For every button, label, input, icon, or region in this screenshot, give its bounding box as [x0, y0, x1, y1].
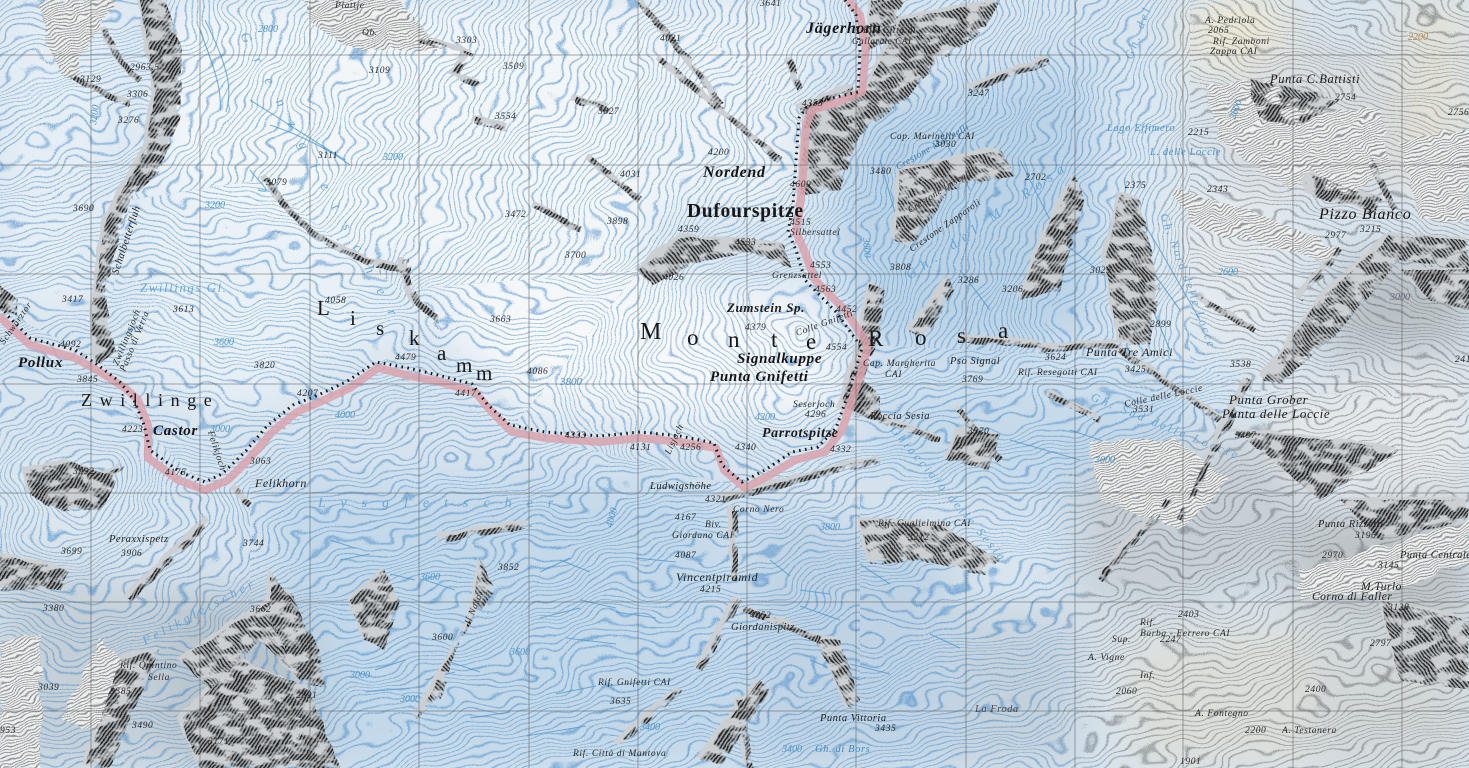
blue glacier and lake names: Lysgletscher: [317, 496, 568, 511]
spot heights: 4092: [60, 340, 81, 350]
blue contour elevation labels: 4200: [755, 412, 775, 423]
secondary place labels: Lisjoch: [663, 423, 686, 457]
spot heights: 3600: [431, 633, 453, 643]
spot heights: 2756: [1448, 108, 1469, 118]
spot heights: 3206: [1001, 285, 1023, 295]
secondary place labels: La Froda: [974, 704, 1019, 715]
label: Liskamm: s: [376, 316, 384, 340]
secondary place labels: Cap. Margherita: [863, 359, 936, 369]
blue glacier and lake names: Lago Effimero: [1106, 123, 1175, 134]
label: Jägerhorn: Jägerhorn: [805, 20, 882, 37]
spot heights: 3497: [1234, 431, 1257, 441]
spot heights: 2963.5: [130, 63, 160, 73]
spot heights: 3129: [79, 75, 101, 85]
spot heights: 4052: [750, 611, 771, 621]
label: Monte Rosa: R: [868, 326, 884, 351]
label: Monte Rosa: n: [728, 327, 740, 352]
blue contour elevation labels: 3200: [204, 200, 225, 211]
spot heights: 3769: [961, 375, 983, 385]
label: Monte Rosa: e: [806, 329, 816, 354]
blue glacier and lake names: Grenzgletscher: [236, 30, 408, 334]
secondary place labels: Punta Rizzetti: [1317, 519, 1384, 530]
secondary place labels: Zwillingsjoch: [112, 308, 143, 367]
spot heights: 4553: [810, 261, 831, 271]
spot heights: 2215: [1188, 128, 1209, 138]
secondary place labels: Colle delle Loccie: [1124, 384, 1204, 410]
label: Castor: Castor: [153, 423, 198, 439]
secondary place labels: A. Fontegno: [1194, 709, 1249, 719]
spot heights: 4333: [565, 431, 586, 441]
label: Felikhorn: Felikhorn: [254, 476, 307, 490]
major mountain labels: [18, 20, 1411, 584]
secondary place labels: Schalbetterfluh: [110, 204, 143, 276]
spot heights: 3852: [497, 563, 519, 573]
blue contour elevation labels: 2800: [258, 24, 278, 35]
spot heights: 4175: [165, 468, 186, 478]
label: Monte Rosa: a: [998, 318, 1008, 343]
blue glacier and lake names: Felikgletscher: [139, 575, 259, 648]
spot heights: 2702: [1025, 173, 1046, 183]
secondary place labels: Crestone Imseng: [906, 169, 973, 216]
spot heights: 953: [0, 726, 16, 736]
secondary place labels: Cap. Marinelli CAI: [890, 132, 975, 142]
secondary place labels: Ob.: [362, 28, 378, 38]
spot heights: 4355: [802, 99, 823, 109]
spot heights: 3845: [76, 375, 98, 385]
blue contour elevation labels: 3800: [860, 236, 873, 258]
spot heights: 4167: [675, 513, 697, 523]
spot heights: 2977: [1325, 231, 1347, 241]
label: Punta Grober: Punta Grober: [1228, 392, 1309, 407]
secondary place labels: Il Naso: [463, 593, 485, 627]
spot heights: 3624: [1044, 353, 1066, 363]
spot heights: 2797: [1370, 639, 1392, 649]
secondary place labels: Corno Nero: [733, 505, 784, 515]
label: Monte Rosa: o: [915, 325, 926, 350]
spot heights: 3490: [131, 721, 153, 731]
blue contour elevation labels: 4000: [604, 507, 620, 529]
spot heights: 2400: [1305, 685, 1326, 695]
label: Pollux: Pollux: [18, 355, 63, 371]
secondary place labels: Punta Vittoria: [819, 713, 887, 724]
spot heights: 2403: [1178, 610, 1199, 620]
secondary place labels: Silbersattel: [790, 228, 840, 238]
label: Liskamm: i: [350, 306, 356, 330]
spot heights: 4031: [620, 170, 641, 180]
blue contour elevation labels: 3000: [1094, 455, 1115, 466]
secondary place labels: Crestone Zapparoli: [908, 198, 983, 254]
secondary place labels: Rif. Resegotti CAI: [1017, 367, 1098, 378]
label: Dufourspitze: Dufourspitze: [687, 201, 804, 222]
secondary place labels: Gallarate CAI: [852, 36, 912, 46]
spot heights: 3472: [504, 210, 526, 220]
spot heights: 3029: [1089, 266, 1111, 276]
spot heights: 4086: [527, 367, 548, 377]
spot heights: 3808: [889, 263, 911, 273]
secondary place labels: Rif. Città di Mantova: [572, 748, 666, 759]
blue glacier and lake names: Gh. di Bors: [815, 744, 870, 755]
spot heights: 3662: [249, 605, 271, 615]
spot heights: 2060: [1116, 687, 1137, 697]
blue contour elevation labels: 3200: [382, 152, 403, 163]
label: Liskamm: k: [409, 326, 420, 350]
spot heights: 3827: [597, 107, 620, 117]
blue contour elevation labels: 2800: [1227, 98, 1245, 121]
label: Pizzo Bianco: Pizzo Bianco: [1318, 206, 1411, 223]
spot heights: 3898: [606, 217, 628, 227]
secondary place labels: Rif. Zamboni: [1212, 36, 1270, 47]
secondary place labels: Rif. Quintino: [119, 660, 177, 671]
spot heights: 4417: [455, 389, 477, 399]
spot heights: 3212: [907, 533, 929, 543]
secondary place labels: Rif. Gnifetti CAI: [597, 677, 671, 688]
blue contour elevation labels: 3800: [819, 522, 840, 533]
spot heights: 3699: [60, 547, 82, 557]
spot heights: 4479: [395, 353, 416, 363]
secondary place labels: Roccia Sesia: [869, 411, 930, 422]
spot heights: 4359: [678, 225, 699, 235]
spot heights: 3538: [1229, 360, 1251, 370]
spot heights: 3306: [126, 90, 148, 100]
spot heights: 3030: [934, 140, 956, 150]
spot heights: 4332: [830, 445, 851, 455]
spot heights: 2375: [1125, 181, 1146, 191]
spot heights: 3145: [1377, 561, 1399, 571]
label: Zumstein Spitze: Zumstein Sp.: [726, 300, 805, 315]
secondary place labels: Giordano CAI: [672, 531, 734, 541]
spot heights: 4215: [700, 585, 721, 595]
secondary place labels: Zappa CAI: [1210, 47, 1258, 57]
blue contour elevation labels: 3600: [509, 647, 530, 658]
blue contour elevation labels: 3600: [419, 572, 440, 583]
label: Nordend: Nordend: [702, 164, 766, 181]
spot heights: 3554: [494, 112, 516, 122]
spot heights: 4340: [735, 443, 756, 453]
label: Monte Rosa: o: [687, 325, 698, 350]
spot heights: 4207: [297, 389, 319, 399]
label: Punta Tre Amici: Punta Tre Amici: [1085, 345, 1173, 359]
spot heights: 4058: [325, 296, 346, 306]
spot heights: 4533: [735, 238, 756, 248]
secondary place labels: Rif.: [1139, 617, 1156, 628]
secondary place labels: Seserjoch: [793, 400, 835, 410]
label: Punta delle Loccie: Punta delle Loccie: [1221, 406, 1330, 421]
secondary place labels: M.Turlo: [1360, 581, 1402, 593]
blue contour elevation labels: 3800: [559, 376, 582, 388]
spot heights: 3585: [109, 687, 131, 697]
secondary place labels: Sella: [148, 673, 170, 683]
secondary place labels: Crestone Marinelli: [894, 122, 971, 173]
label: Monte Rosa: s: [957, 323, 966, 348]
spot heights: 3820: [253, 361, 275, 371]
spot heights: 2065: [1208, 26, 1229, 36]
label: Liskamm: L: [317, 296, 330, 320]
blue glacier and lake names: Gh. del M. Rosa: [904, 158, 1073, 283]
spot heights: 3303: [455, 36, 477, 46]
spot heights: 4296: [805, 410, 826, 420]
spot heights: 4515: [790, 218, 811, 228]
spot heights: 2200: [1245, 726, 1266, 736]
spot heights: 2754: [1335, 93, 1356, 103]
blue contour elevation labels: 3400: [781, 744, 802, 755]
spot heights: 3425: [1124, 365, 1146, 375]
secondary place labels: Pso Signal: [949, 356, 1000, 367]
secondary place labels: Peraxxispetz: [108, 534, 169, 545]
spot heights: 4200: [708, 148, 729, 158]
secondary place labels: A. Vigne: [1087, 653, 1125, 663]
spot heights: 3247: [967, 89, 990, 99]
blue contour elevation labels: 3600: [213, 337, 234, 348]
label: Monte Rosa: [640, 318, 1008, 354]
spot heights: 3039: [37, 683, 59, 693]
blue glacier and lake names: [139, 0, 1242, 755]
label: Liskamm: a: [437, 341, 447, 365]
spot heights: 3480: [869, 167, 891, 177]
blue contour elevation labels: 3000: [349, 670, 370, 681]
label: Punta C. Battisti: Punta C.Battisti: [1269, 72, 1360, 86]
spot heights: 3417: [61, 295, 84, 305]
spot heights: 4563: [815, 285, 836, 295]
spot heights: 4026: [663, 273, 684, 283]
spot heights: 3380: [42, 604, 64, 614]
spot heights: 1901: [1180, 757, 1201, 767]
secondary place labels: Plattje: [334, 1, 365, 11]
secondary place labels: Inf.: [1139, 670, 1155, 681]
glacier crevasse strokes: [200, 20, 1200, 736]
blue contour elevation labels: 3000: [1389, 292, 1410, 303]
spot heights: 3613: [172, 305, 194, 315]
secondary place labels: Corno di Faller: [1312, 591, 1392, 603]
spot heights: 4379: [745, 323, 766, 333]
spot heights: 3276: [117, 116, 139, 126]
blue contour elevation labels: 2200: [1408, 32, 1428, 43]
spot heights: 2970: [1322, 551, 1343, 561]
spot heights: 2343: [1207, 185, 1228, 195]
spot heights: 2899: [1150, 320, 1171, 330]
spot heights: 4321: [705, 495, 726, 505]
spot heights: 4256: [680, 443, 701, 453]
spot heights: 4554: [826, 343, 847, 353]
label: Parrotspitze: Parrotspitze: [762, 426, 838, 441]
spot heights: 3196: [1354, 531, 1376, 541]
blue contour elevation labels: 3400: [639, 722, 660, 733]
spot heights: 4021: [660, 34, 681, 44]
spot heights: 3635: [609, 697, 631, 707]
secondary place labels: Biv. Città di: [863, 26, 916, 36]
spot heights: 3215: [1359, 225, 1381, 235]
label: Liskamm: m: [476, 361, 492, 385]
spot heights: 3109: [368, 66, 390, 76]
label: Signalkuppe: Signalkuppe: [737, 351, 822, 367]
blue glacier and lake names: Ghiacciaio delle Sesia: [888, 423, 1010, 565]
secondary place labels: Passo di Verra: [118, 310, 152, 374]
secondary place labels: Biv.: [705, 520, 722, 530]
spot heights: 3570: [967, 427, 989, 437]
national border band and dotted boundary: [0, 0, 868, 490]
secondary place labels: Sup.: [1112, 635, 1131, 645]
label: Vincentpiramid: Vincentpiramid: [676, 570, 759, 584]
spot heights: 3063: [249, 457, 271, 467]
spot heights: 3111: [317, 151, 338, 161]
spot heights: 2247: [1160, 635, 1182, 645]
spot heights: 3435: [874, 724, 896, 734]
blue glacier and lake names: Gh. Sud delle Loccie: [1089, 390, 1242, 463]
spot heights: 4223: [122, 425, 143, 435]
secondary place labels: Grenzsattel: [772, 271, 822, 281]
secondary place labels: Colle Gnifetti: [794, 308, 855, 339]
label: Punta Gnifetti: Punta Gnifetti: [710, 369, 809, 385]
spot heights: 3992: [72, 467, 94, 477]
blue contour elevation labels: 2600: [1218, 267, 1238, 278]
spot heights: 3286: [957, 276, 979, 286]
blue contour elevation labels: 3000: [399, 694, 420, 705]
spot heights: 3128: [1387, 603, 1409, 613]
label: Zwillinge: Zwillinge: [81, 390, 219, 410]
secondary place labels: CAI: [885, 370, 902, 380]
spot heights: 4131: [630, 443, 651, 453]
spot heights: 4087: [675, 551, 697, 561]
spot heights: 3700: [564, 251, 586, 261]
spot heights: 4452: [836, 305, 857, 315]
blue glacier and lake names: Gh. Nord delle Locce: [1157, 211, 1219, 350]
secondary place labels: A. Pedriola: [1204, 16, 1255, 26]
spot heights: 3744: [242, 539, 264, 549]
label: Monte Rosa: M: [640, 319, 661, 345]
spot heights: 3171: [207, 737, 229, 747]
spot heights: 3079: [265, 178, 287, 188]
label: Liskamm: [317, 296, 492, 385]
secondary place labels: A. Testanera: [1281, 726, 1337, 736]
spot heights: 4609: [790, 180, 811, 190]
blue glacier and lake names: Zwillings Gl.: [140, 280, 227, 295]
spot heights: 2891: [296, 691, 317, 701]
label: Liskamm: m: [456, 353, 472, 377]
blue contour elevation labels: 4000: [335, 410, 355, 421]
spot heights: 3906: [120, 549, 142, 559]
secondary place labels: Ludwigshöhe: [649, 481, 712, 492]
secondary place labels: Felikjoch: [205, 429, 227, 472]
blue contour elevation labels: 3200: [88, 104, 102, 126]
blue contour elevation labels: 3000: [209, 424, 230, 435]
blue glacier and lake names: L. delle Loccie: [1149, 147, 1221, 158]
label: Monte Rosa: t: [771, 327, 778, 352]
secondary place labels: Rif. Guglielmina CAI: [877, 518, 971, 529]
spot heights: 3663: [489, 315, 511, 325]
spot heights: 3690: [72, 204, 94, 214]
spot heights: 3509: [502, 62, 524, 72]
secondary place labels: Giordanispitz: [731, 622, 795, 633]
secondary place labels: Barba - Ferrero CAI: [1140, 629, 1230, 639]
spot heights: 3531: [1132, 405, 1154, 415]
